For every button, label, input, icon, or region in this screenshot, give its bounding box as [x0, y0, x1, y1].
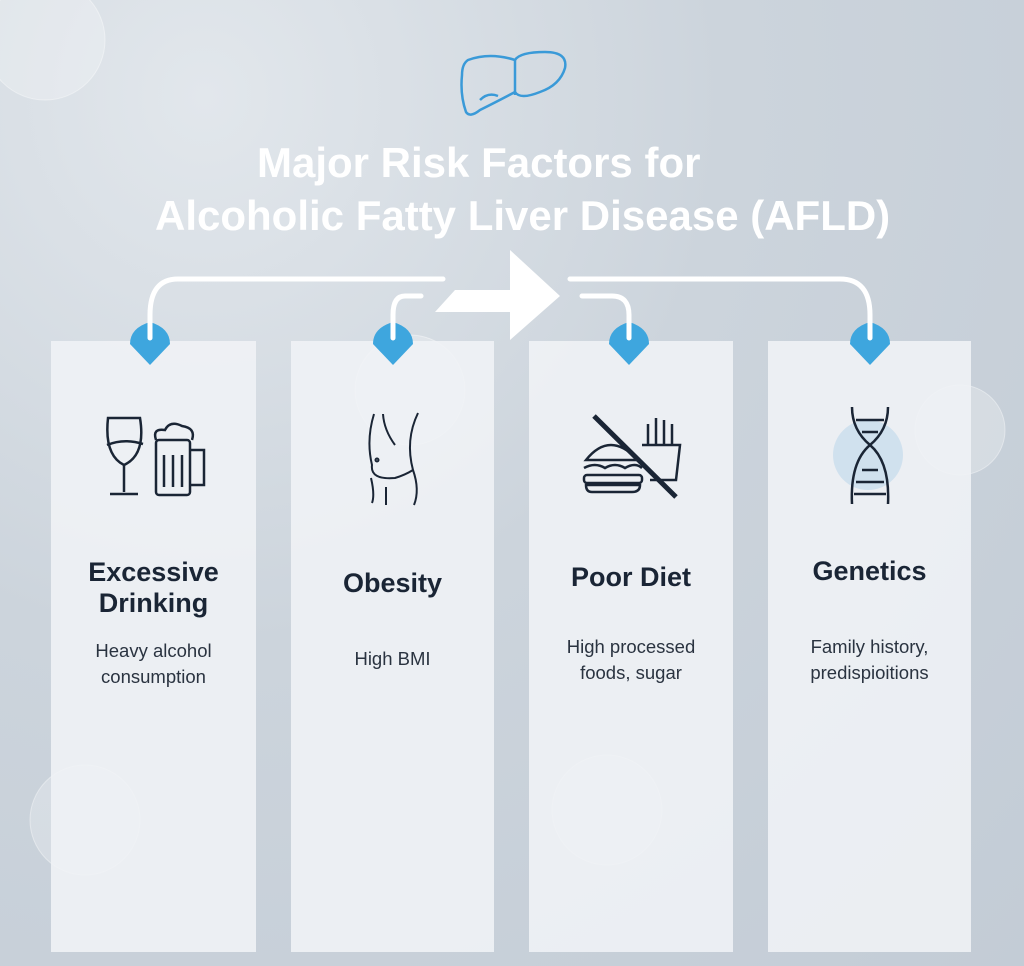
panel: excessive drinking	[51, 341, 256, 952]
panel: obesity: High BMI	[354, 648, 431, 669]
panel: obesity	[291, 341, 494, 952]
panel: excessive drinking: consumption	[101, 666, 206, 687]
panel: genetics: Genetics	[812, 556, 927, 586]
text: Major Risk Factors for	[257, 139, 700, 186]
title	[155, 139, 890, 239]
panel: poor diet: High processed	[567, 636, 695, 657]
panel: genetics	[768, 341, 971, 952]
panel: excessive drinking: Heavy alcohol	[95, 640, 212, 661]
panel: poor diet: Poor Diet	[571, 562, 691, 592]
panel: excessive drinking: Drinking	[99, 588, 208, 618]
panel: poor diet: foods, sugar	[580, 662, 682, 683]
panel: obesity: Obesity	[343, 568, 442, 598]
panel: excessive drinking: Excessive	[88, 557, 219, 587]
panel: genetics: Family history,	[811, 636, 928, 657]
text: Alcoholic Fatty Liver Disease (AFLD)	[155, 192, 890, 239]
panel: genetics: predispioitions	[810, 662, 929, 683]
panel: poor diet	[529, 341, 733, 952]
